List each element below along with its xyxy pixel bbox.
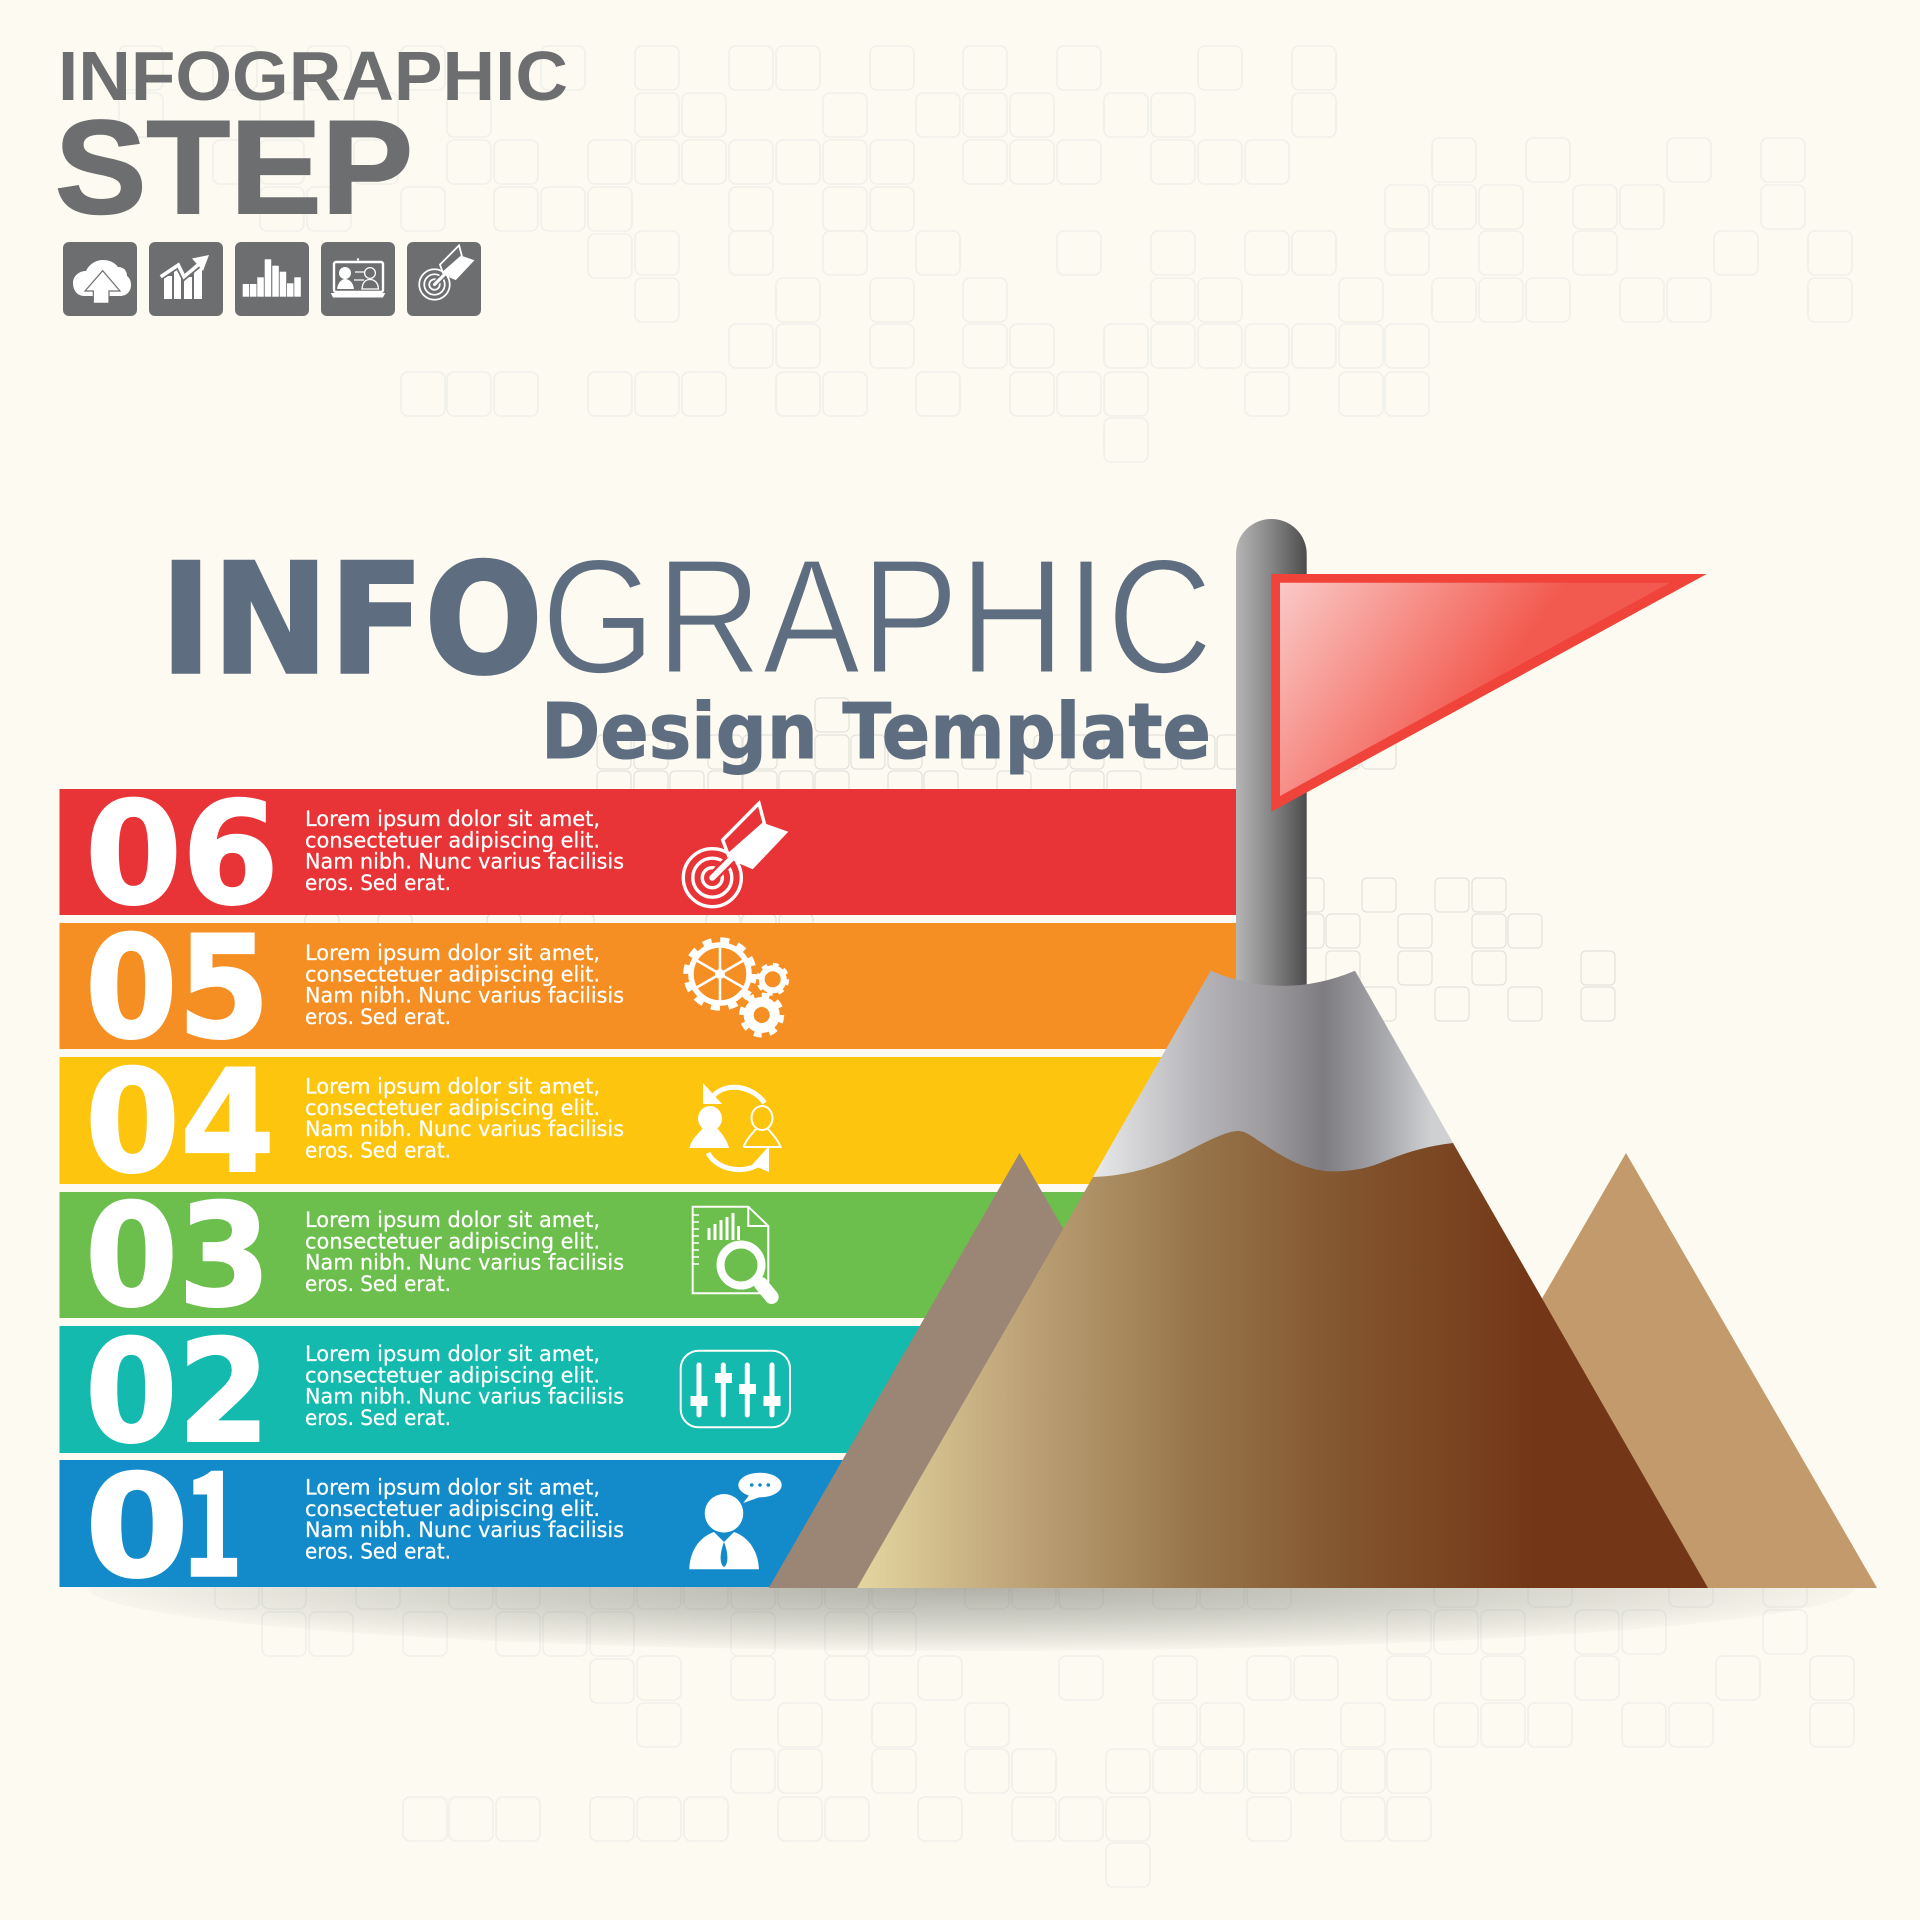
- header title: STEP: STEP: [55, 94, 413, 242]
- step 04: [60, 1040, 1240, 1205]
- mountain snow cap: [1093, 971, 1453, 1177]
- text block 03: Nam nibh. Nunc varius facilisis: [305, 1251, 624, 1276]
- number 06: 06: [85, 772, 279, 937]
- text block 02: eros. Sed erat.: [305, 1406, 451, 1431]
- text block 03: Lorem ipsum dolor sit amet,: [305, 1208, 600, 1233]
- icon row: [63, 242, 481, 316]
- text block 05: Lorem ipsum dolor sit amet,: [305, 941, 600, 966]
- text block 05: Nam nibh. Nunc varius facilisis: [305, 984, 624, 1009]
- icon: histogram: [235, 242, 309, 316]
- icon: cloud upload: [63, 242, 137, 316]
- main title: INFOGRAPHIC: [160, 525, 1213, 710]
- main title: INFOGRAPHIC: GRAPHIC: [541, 525, 1213, 708]
- icon: target and arrow: [407, 242, 481, 316]
- text block 04: Nam nibh. Nunc varius facilisis: [305, 1117, 624, 1142]
- text block 03: [305, 1208, 624, 1297]
- ground shadow: [87, 1523, 1855, 1651]
- icon: sliders: [681, 1351, 790, 1427]
- step 06: [60, 772, 1240, 937]
- number 01: 0: [85, 1445, 189, 1610]
- step 03: [60, 1174, 1240, 1339]
- main title: INFOGRAPHIC: INFO: [160, 532, 543, 710]
- text block 01: eros. Sed erat.: [305, 1539, 451, 1564]
- step 05: [60, 906, 1240, 1071]
- step 02: [60, 1310, 1240, 1475]
- flag pole: [1236, 519, 1307, 990]
- flag: [1271, 574, 1707, 812]
- number 04: 04: [85, 1040, 275, 1205]
- text block 06: [305, 807, 624, 896]
- text block 01: Nam nibh. Nunc varius facilisis: [305, 1518, 624, 1543]
- subtitle: Design Template: Design Template: [541, 688, 1211, 777]
- icon: target and arrow: [683, 803, 788, 907]
- step bars: [60, 772, 1240, 1618]
- number 01: [85, 1408, 243, 1618]
- number 05: 05: [85, 906, 270, 1071]
- text block 03: eros. Sed erat.: [305, 1272, 451, 1297]
- number 02: 02: [85, 1310, 270, 1475]
- text block 04: eros. Sed erat.: [305, 1138, 451, 1163]
- icon: growth chart: [149, 242, 223, 316]
- text block 03: consectetuer adipiscing elit.: [305, 1229, 600, 1254]
- text block 01: Lorem ipsum dolor sit amet,: [305, 1476, 600, 1500]
- icon: person speaking: [689, 1473, 782, 1569]
- step 01: [60, 1408, 1240, 1618]
- small left mountain: [769, 1153, 1270, 1588]
- text block 02: Nam nibh. Nunc varius facilisis: [305, 1385, 624, 1410]
- main mountain: [857, 971, 1708, 1588]
- header title: INFOGRAPHIC: INFOGRAPHIC: [58, 37, 568, 115]
- small right mountain: [1375, 1153, 1877, 1588]
- text block 04: [305, 1074, 624, 1163]
- text block 06: Nam nibh. Nunc varius facilisis: [305, 850, 624, 875]
- text block 06: Lorem ipsum dolor sit amet,: [305, 807, 600, 832]
- text block 06: eros. Sed erat.: [305, 871, 451, 896]
- number 01: 1: [183, 1408, 243, 1618]
- text block 01: [305, 1476, 624, 1564]
- text block 04: consectetuer adipiscing elit.: [305, 1096, 600, 1121]
- text block 05: eros. Sed erat.: [305, 1005, 451, 1030]
- text block 01: consectetuer adipiscing elit.: [305, 1497, 600, 1522]
- text block 04: Lorem ipsum dolor sit amet,: [305, 1074, 600, 1100]
- icon: gears: [686, 940, 787, 1035]
- text block 02: [305, 1342, 624, 1431]
- text block 02: Lorem ipsum dolor sit amet,: [305, 1342, 600, 1367]
- icon: document search: [693, 1207, 772, 1297]
- text block 06: consectetuer adipiscing elit.: [305, 828, 600, 853]
- number 03: 03: [85, 1174, 271, 1339]
- icon: people exchange: [690, 1083, 780, 1172]
- text block 02: consectetuer adipiscing elit.: [305, 1363, 600, 1388]
- text block 05: consectetuer adipiscing elit.: [305, 962, 600, 987]
- icon: laptop with people: [321, 242, 395, 316]
- text block 05: [305, 941, 624, 1030]
